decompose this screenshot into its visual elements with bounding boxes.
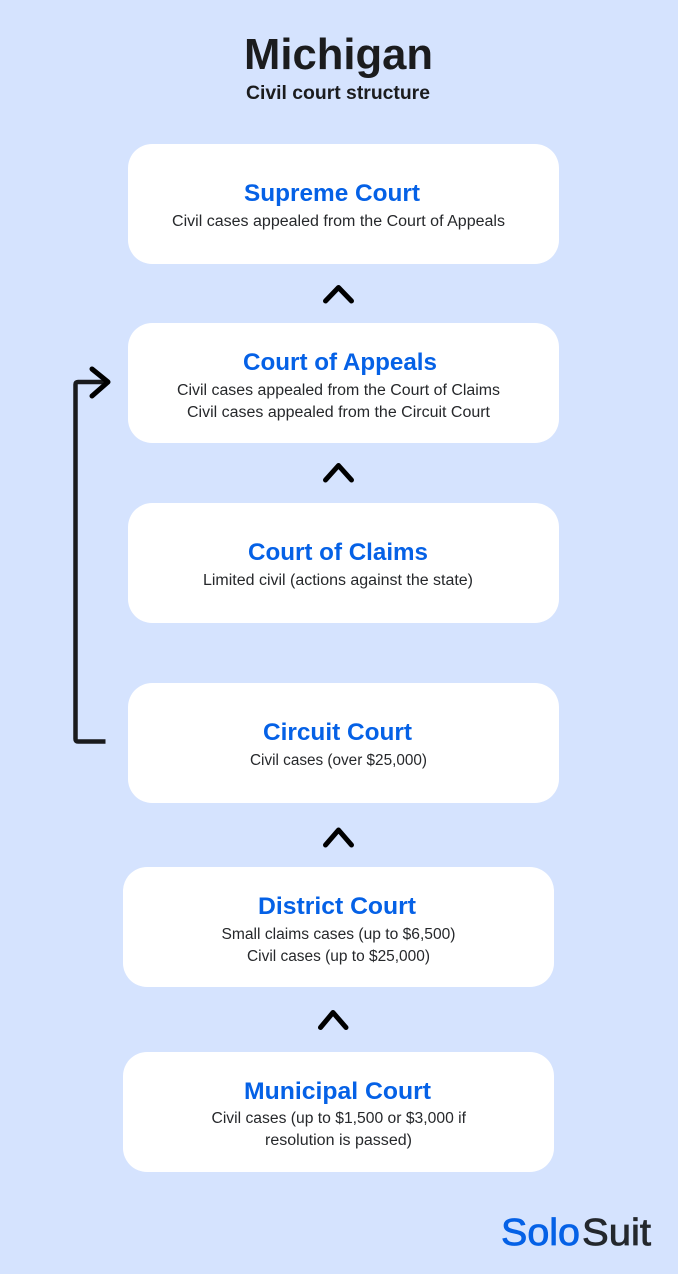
- panel: Municipal Court: [123, 1052, 554, 1172]
- panel: Municipal Court: resolution is passed): [265, 1132, 412, 1149]
- logo: SoloSuit: Suit: [582, 1212, 651, 1254]
- panel: District Court: [123, 867, 554, 987]
- panel: Municipal Court: Civil cases (up to $1,500 or $3,000 if: [212, 1110, 467, 1127]
- panel: Court of Appeals: Civil cases appealed from the Court of Claims: [177, 382, 500, 399]
- panel: District Court: District Court: [258, 893, 416, 920]
- panel: Circuit Court: Circuit Court: [263, 719, 412, 746]
- panel: Supreme Court: Civil cases appealed from the Court of Appeals: [172, 213, 505, 230]
- arrow: Circuit Court to Court of Appeals bracket: [76, 369, 108, 742]
- arrow: Court of Claims to Court of Appeals: [326, 466, 352, 480]
- arrow: District Court to Circuit Court: [326, 830, 352, 845]
- panel: Court of Appeals: [128, 323, 559, 443]
- panel: Circuit Court: Civil cases (over $25,000): [250, 752, 427, 769]
- panel: District Court: Small claims cases (up to $6,500): [222, 926, 456, 943]
- arrow: Municipal Court to District Court: [320, 1012, 346, 1028]
- panel: Circuit Court: [128, 683, 559, 803]
- panel: Court of Appeals: Court of Appeals: [243, 349, 437, 376]
- panel: Supreme Court: [128, 144, 559, 264]
- panel: Court of Claims: [128, 503, 559, 623]
- logo: SoloSuit: [501, 1212, 651, 1254]
- arrow: Court of Appeals to Supreme Court: [326, 288, 352, 301]
- panel: Supreme Court: Supreme Court: [244, 180, 420, 207]
- logo: SoloSuit: Solo: [501, 1212, 580, 1254]
- panel: Court of Claims: Limited civil (actions against the state): [203, 572, 473, 589]
- panel: District Court: Civil cases (up to $25,000): [247, 948, 430, 965]
- panel: Municipal Court: Municipal Court: [244, 1078, 431, 1105]
- subtitle: Civil court structure: [246, 83, 430, 104]
- panel: Court of Appeals: Civil cases appealed from the Circuit Court: [187, 404, 491, 421]
- panel: Court of Claims: Court of Claims: [248, 539, 428, 566]
- title: Michigan: [244, 30, 433, 79]
